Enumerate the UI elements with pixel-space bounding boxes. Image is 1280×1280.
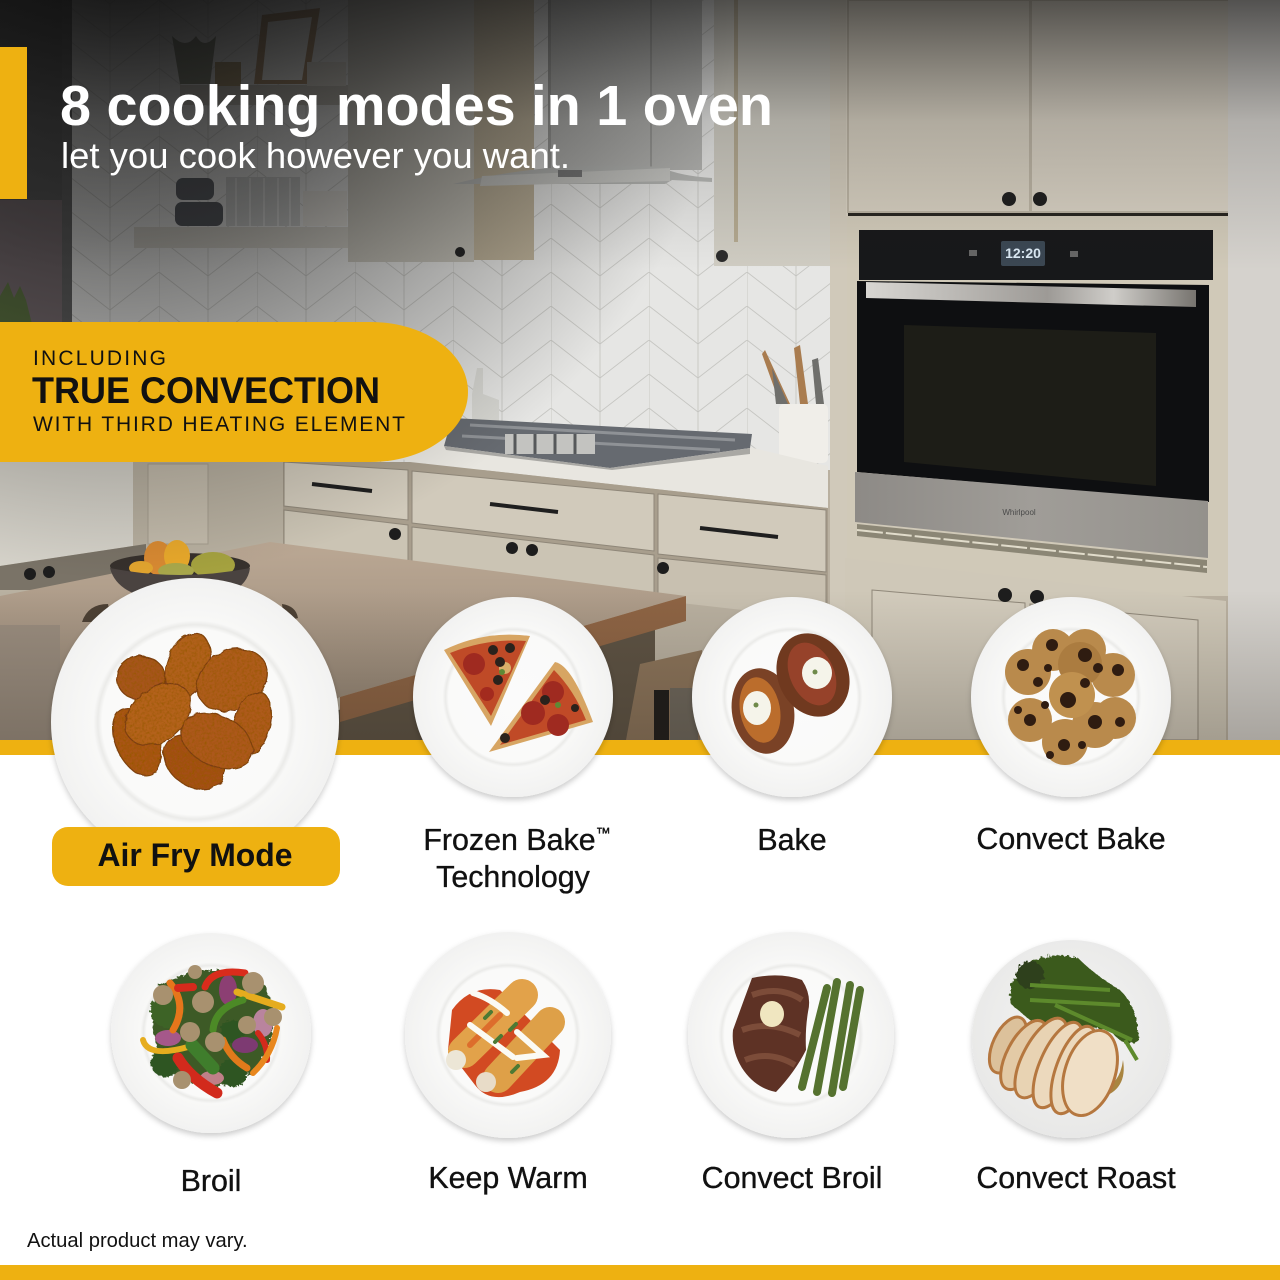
- pizza food: [444, 635, 593, 752]
- label: Frozen Bake: [423, 823, 596, 857]
- shadow under island: [300, 620, 686, 740]
- badge: true convection: [0, 322, 468, 462]
- mode: air fry: [51, 578, 339, 866]
- label: Bake: [757, 823, 827, 857]
- mode: frozen bake: [413, 597, 613, 857]
- label: ™: [596, 825, 611, 842]
- lighting overlays: [0, 0, 1280, 270]
- plate: [111, 933, 311, 1133]
- mode: bake: [692, 597, 892, 857]
- plate: [413, 597, 613, 797]
- farmhouse sink and left base: [0, 462, 283, 602]
- dining chair: [626, 650, 702, 740]
- backsplash: [70, 0, 840, 470]
- subtitle: let you cook however you want.: [61, 135, 570, 176]
- countertop: [400, 436, 828, 508]
- fried chicken food: [103, 627, 279, 801]
- baked potatoes food: [725, 621, 863, 759]
- tall cabinets: [830, 0, 1280, 740]
- label: air fry mode: [52, 827, 340, 886]
- base cabinets: [283, 462, 828, 700]
- right cabinets beside island: [655, 600, 830, 740]
- bottom yellow band: [0, 1265, 1280, 1280]
- open shelves with decor: [134, 8, 350, 248]
- label: Keep Warm: [428, 1161, 588, 1195]
- white lower section: [0, 755, 1280, 1280]
- cookies food: [1005, 629, 1136, 765]
- wall oven: 12:20: [1005, 245, 1041, 261]
- range hood: [453, 0, 712, 186]
- plate: [51, 578, 339, 866]
- left upper cabinet: [348, 0, 534, 262]
- lower right cabinets: [845, 558, 1226, 740]
- label: Convect Bake: [976, 822, 1166, 856]
- label: Convect Roast: [976, 1161, 1176, 1195]
- roasted vegetables food: [143, 965, 282, 1093]
- yellow band: [0, 740, 1280, 755]
- plate: [972, 940, 1170, 1138]
- door frame and wall on the left: [0, 0, 72, 324]
- mode: keep warm: [405, 932, 611, 1195]
- wicker placemat: [82, 604, 298, 622]
- badge: true convection: WITH THIRD HEATING ELEMENT: [33, 413, 405, 436]
- utensil crock: [762, 345, 828, 463]
- plate: [692, 597, 892, 797]
- enchiladas food: [446, 989, 560, 1097]
- fruit bowl: [110, 540, 250, 602]
- mode: convect bake: [971, 597, 1171, 856]
- chicken and broccolini food: [982, 955, 1138, 1123]
- label: Convect Broil: [702, 1161, 882, 1195]
- right upper small cabinet: [714, 0, 830, 266]
- wall oven: [855, 230, 1213, 573]
- yellow accent bar: [0, 47, 27, 199]
- title: 8 cooking modes in 1 oven: [60, 74, 773, 138]
- mode: convect roast: [972, 940, 1176, 1195]
- plate: [688, 932, 894, 1138]
- mode: convect broil: [688, 932, 894, 1195]
- steak and asparagus food: [733, 975, 860, 1093]
- island table: [0, 542, 686, 740]
- badge: true convection: TRUE CONVECTION: [32, 370, 380, 411]
- mode: broil: [111, 933, 311, 1198]
- label: Broil: [181, 1164, 241, 1198]
- label: air fry mode: Air Fry Mode: [98, 837, 292, 873]
- gas cooktop: [444, 418, 752, 470]
- label: technology: Technology: [436, 860, 591, 894]
- badge: true convection: INCLUDING: [33, 347, 166, 370]
- soap dispenser: [472, 368, 499, 422]
- wall oven: Whirlpool: [1002, 508, 1036, 517]
- disclaimer: Actual product may vary.: [27, 1230, 248, 1252]
- plate: [971, 597, 1171, 797]
- plate: [405, 932, 611, 1138]
- kitchen background photo scene: [0, 0, 1280, 740]
